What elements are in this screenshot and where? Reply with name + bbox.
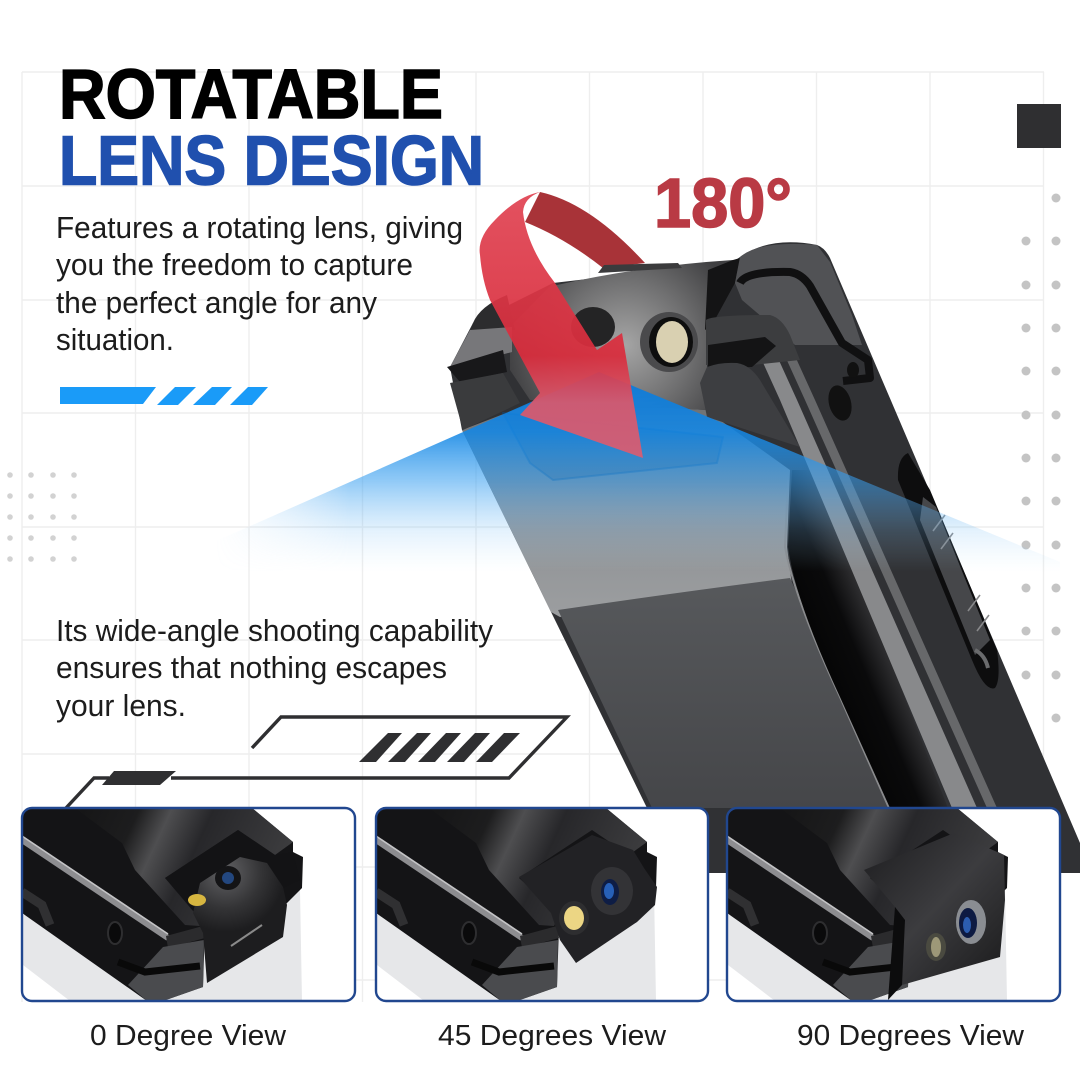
second paragraph: Its wide-angle shooting capability	[56, 613, 493, 648]
led	[926, 933, 946, 961]
dot pattern right	[1022, 194, 1060, 722]
title	[59, 55, 484, 200]
dark square accent	[1017, 104, 1061, 148]
lens ring	[215, 866, 241, 890]
panel: 0 degree view	[22, 808, 355, 1001]
lens	[959, 908, 977, 938]
description paragraph 1: Features a rotating lens, giving	[56, 210, 463, 245]
led	[656, 321, 688, 363]
slider ridges	[933, 515, 989, 631]
left hinge top lump	[470, 295, 515, 332]
led	[564, 906, 584, 930]
description paragraph 1: the perfect angle for any	[56, 285, 377, 320]
second paragraph: your lens.	[56, 688, 186, 723]
decorative line frame with stripes	[66, 717, 567, 808]
lens	[222, 872, 234, 884]
rib block notch	[708, 337, 776, 368]
drum	[519, 835, 657, 963]
head barrel	[510, 260, 733, 410]
back of red rotation arrow	[525, 192, 645, 268]
lens ring	[591, 867, 633, 915]
clip right edge highlight	[785, 480, 889, 808]
title: LENS DESIGN	[59, 122, 484, 200]
title: ROTATABLE	[59, 55, 443, 133]
lens recess	[165, 833, 275, 912]
right hinge gray lump	[735, 244, 862, 345]
black crease band	[788, 470, 948, 808]
rib block top	[706, 315, 800, 365]
blue dashed accent bar	[60, 387, 268, 405]
caption: 0 degree: 0 Degree View	[90, 1020, 287, 1052]
top button	[598, 263, 682, 273]
dot pattern left	[7, 472, 77, 562]
camera device	[447, 242, 1080, 873]
drum face	[193, 857, 287, 983]
back plate	[450, 242, 1080, 873]
drum	[864, 833, 1005, 985]
speaker slot	[231, 925, 262, 946]
slider end highlight	[975, 650, 988, 668]
description paragraph 1: situation.	[56, 322, 174, 357]
rib plate	[700, 363, 800, 447]
bracket slot	[740, 272, 870, 381]
left hinge black band	[447, 350, 507, 382]
second rib	[780, 345, 997, 808]
red rotation arrow	[480, 192, 643, 458]
led socket	[649, 317, 693, 367]
blue field of view wedge	[250, 373, 1043, 564]
clip upper face	[462, 400, 792, 617]
device tab recess	[503, 413, 723, 480]
slider	[920, 497, 990, 655]
screws	[825, 362, 859, 423]
left hinge lower lump	[450, 373, 520, 430]
lens	[601, 879, 619, 905]
lens socket	[571, 307, 615, 347]
led	[188, 894, 206, 906]
second paragraph	[56, 613, 493, 723]
barrel shadow	[705, 258, 740, 330]
description paragraph 1	[56, 210, 463, 357]
side slot	[898, 453, 999, 688]
left hinge gray part	[450, 327, 512, 367]
clip lower face	[558, 578, 889, 808]
drum side	[888, 907, 905, 1000]
light rib	[755, 345, 977, 808]
panel: 90 degree view	[727, 808, 1060, 1001]
caption: 90 degrees: 90 Degrees View	[797, 1020, 1025, 1052]
caption: 45 degrees: 45 Degrees View	[438, 1020, 667, 1052]
second paragraph: ensures that nothing escapes	[56, 650, 447, 685]
180 degree label: 180°	[654, 164, 792, 242]
led ring	[559, 901, 589, 935]
lens ring	[956, 900, 986, 944]
description paragraph 1: you the freedom to capture	[56, 247, 413, 282]
panel: 45 degree view	[376, 808, 708, 1001]
led ring	[640, 312, 698, 372]
